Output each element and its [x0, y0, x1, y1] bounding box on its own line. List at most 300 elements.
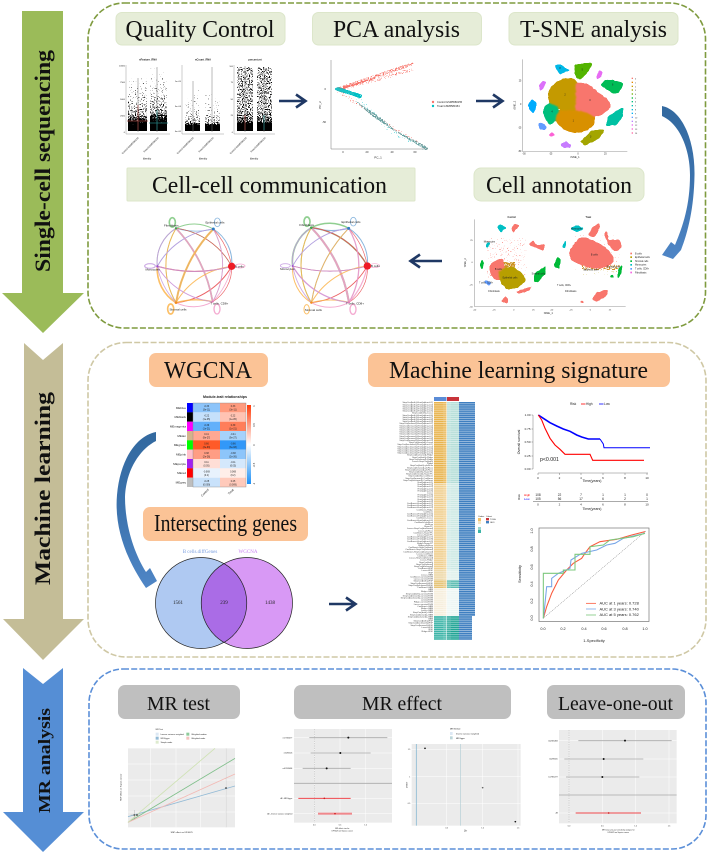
chart: Kaplan-Meier survival curves: High — [524, 493, 531, 497]
chart: cell communication network, control: Fibroblasts — [164, 224, 179, 228]
chart: cell annotation t-SNE: Epithelial cells — [503, 277, 518, 280]
chart: ROC curves: AUC at 3 years: 0.740 — [600, 606, 640, 611]
row labels: Ridge — [427, 463, 434, 465]
heading: Machine learning signature — [368, 353, 670, 387]
chart: quality control violin plots: 10000 — [119, 66, 126, 68]
chart: WGCNA module-trait heatmap: MEtan — [177, 434, 186, 438]
chart: WGCNA module-trait heatmap: Treat — [227, 488, 235, 496]
row labels: StepCox[both]+Lasso — [412, 412, 434, 415]
chart: MR effect forest plot: 0.5 — [339, 825, 341, 827]
chart: WGCNA module-trait heatmap: (0.009) — [229, 484, 237, 486]
row labels: StepCox[backward] — [414, 565, 433, 568]
arrow: quality control to PCA — [279, 94, 306, 108]
chart: ROC curves: 0.6 — [530, 564, 534, 570]
chart: WGCNA module-trait heatmap: MEblack — [174, 415, 186, 419]
row labels: StepCox[both]+Enet[alpha=0.6] — [402, 414, 433, 417]
row labels: StepCox[backward]+Enet[alpha=0.3] — [397, 447, 433, 450]
chart: cell annotation t-SNE — [463, 216, 651, 315]
chart: cell annotation t-SNE: -25 — [470, 284, 473, 286]
row labels: CoxBoost+SuperPC — [413, 531, 433, 534]
chart: t-SNE clusters: -50 — [518, 151, 522, 153]
chart: leave-one-out forest plot: 1.0 — [634, 826, 637, 828]
chart: MR funnel plot — [406, 728, 521, 833]
heading: Cell annotation — [474, 168, 644, 201]
chart: ROC curves: 0.0 — [540, 627, 546, 631]
heading: MR effect: MR effect — [362, 693, 442, 715]
chart: quality control violin plots: Identity — [199, 156, 208, 160]
chart: MR funnel plot: 0.5 — [408, 803, 410, 805]
row labels: StepCox[both]+Enet[alpha=0.1] — [402, 401, 433, 404]
chart: cell annotation t-SNE: 0 — [513, 309, 515, 311]
heading: PCA analysis: PCA analysis — [333, 17, 460, 43]
chart: WGCNA module-trait heatmap: -0.38 — [230, 453, 236, 455]
chart: t-SNE clusters: 25 — [519, 81, 522, 83]
chart: MR effect forest plot: rs62305484 — [283, 768, 292, 770]
chart: leave-one-out forest plot: 0.5 — [601, 826, 604, 828]
chart: cell annotation t-SNE: Stromal cells — [532, 273, 546, 276]
chart: WGCNA module-trait heatmap: -0.11 — [230, 462, 236, 464]
row labels: StepCox[forward]+Lasso — [409, 441, 434, 444]
chart: cell annotation t-SNE: B cells — [635, 253, 643, 255]
heatmap legend: Cohort — [486, 515, 492, 518]
chart: ROC curves: 0.2 — [530, 598, 534, 604]
chart: Kaplan-Meier survival curves: 22 — [558, 493, 561, 497]
chart: PCA scatter: PC_2 — [318, 101, 322, 109]
chart: ROC curves: AUC at 5 years: 0.762 — [600, 612, 640, 617]
chart: t-SNE clusters: 7 — [635, 106, 636, 108]
heading: Leave-one-out — [547, 685, 685, 719]
chart: Kaplan-Meier survival curves: 0 — [646, 493, 648, 497]
row labels: StepCox[both]+RSF — [413, 580, 434, 583]
row labels: Lasso+GBM — [421, 610, 433, 612]
chart: t-SNE clusters: -25 — [549, 154, 553, 156]
chart: cell annotation t-SNE: 0 — [590, 309, 592, 311]
heading: Quality Control: Quality Control — [126, 17, 275, 43]
arrow: annotation to communication — [410, 254, 442, 268]
row labels: Ridge+RSF — [422, 631, 434, 633]
chart: WGCNA module-trait heatmap: MEgrey — [176, 480, 186, 484]
chart: cell communication network, treat: Epithelial cells — [342, 220, 361, 224]
row labels: RSF — [429, 629, 434, 631]
chart: t-SNE clusters: tSNE_2 — [512, 100, 516, 110]
row labels: CoxBoost+GBM — [417, 586, 433, 589]
chart: t-SNE clusters: 25 — [604, 154, 607, 156]
row labels: CoxBoost+Enet[alpha=0.1] — [407, 502, 433, 505]
chart: Kaplan-Meier survival curves: 2 — [559, 476, 561, 480]
chart: WGCNA module-trait heatmap: -0.41 — [230, 434, 236, 436]
chart: WGCNA module-trait heatmap: 1 — [252, 405, 256, 407]
chart: quality control violin plots: 7500 — [120, 82, 126, 84]
arrow: Machine learning — [3, 343, 84, 660]
row labels: StepCox[both]+Enet[alpha=0.9] — [402, 420, 433, 423]
row labels: Ridge+SuperPC — [417, 542, 433, 545]
row labels: Lasso+RSF — [422, 570, 434, 572]
row labels: CoxBoost+Enet[alpha=0.2] — [407, 504, 433, 507]
chart: WGCNA module-trait heatmap — [170, 395, 256, 498]
chart: WGCNA module-trait heatmap: (3e-93) — [203, 447, 210, 449]
row labels: CoxBoost+plsRcox — [414, 521, 434, 524]
chart: Kaplan-Meier survival curves: 10 — [645, 502, 649, 506]
chart: Venn diagram of intersecting genes: 1438 — [265, 601, 276, 606]
row labels: StepCox[forward] — [416, 563, 433, 566]
chart: WGCNA module-trait heatmap: 0.66 — [204, 443, 209, 445]
row labels: StepCox[forward]+CoxBoost — [405, 477, 433, 480]
arrow: Single-cell sequencing: Single-cell sequencing — [30, 50, 55, 272]
row labels: plsRcox — [425, 524, 434, 526]
chart: WGCNA module-trait heatmap: 0.22 — [231, 415, 236, 417]
chart: Kaplan-Meier survival curves: 7 — [580, 493, 582, 497]
chart: quality control violin plots: 2500 — [120, 116, 126, 118]
chart: Kaplan-Meier survival curves: 0 — [537, 502, 539, 506]
row labels: StepCox[forward]+Enet[alpha=0.8] — [399, 437, 433, 440]
row labels: Lasso+CoxBoost — [416, 552, 433, 555]
row labels: StepCox[both]+plsRcox — [410, 464, 434, 467]
chart: t-SNE clusters: 8 — [559, 68, 561, 70]
row labels: CoxBoost+RSF — [418, 567, 434, 570]
chart: quality control violin plots: Treat:GSM5580154 — [143, 136, 160, 154]
chart: leave-one-out forest plot: rs6285505 — [549, 759, 558, 761]
row labels: Lasso+StepCox[both] — [412, 460, 433, 463]
chart: PCA scatter: 40 — [391, 150, 394, 154]
row labels: Enet[alpha=0.3] — [418, 485, 433, 488]
chart: Venn diagram of intersecting genes — [156, 550, 292, 648]
chart: quality control violin plots: Control:GSM5580155 — [121, 136, 140, 155]
row labels: StepCox[backward]+GBM — [408, 615, 433, 618]
arrow: Single-cell sequencing — [2, 11, 84, 333]
chart: Kaplan-Meier survival curves: 4 — [580, 502, 582, 506]
heading: MR test — [118, 685, 240, 719]
chart: PCA scatter: Control:GSM5580155 — [437, 100, 463, 104]
chart: WGCNA module-trait heatmap: 0.41 — [204, 434, 209, 436]
chart: Kaplan-Meier survival curves: 8 — [624, 476, 626, 480]
row labels: StepCox[forward]+SuperPC — [406, 473, 433, 476]
heading: PCA analysis — [312, 12, 482, 45]
chart: WGCNA module-trait heatmap: (3e-11) — [229, 410, 237, 412]
chart: PCA scatter: 0 — [342, 150, 344, 154]
chart: WGCNA module-trait heatmap: Control — [200, 488, 210, 498]
chart: t-SNE clusters — [512, 59, 638, 159]
chart: WGCNA module-trait heatmap: Module-trait relationships — [203, 395, 247, 399]
heading: WGCNA — [149, 353, 268, 387]
chart: quality control violin plots: 0e+00 — [175, 131, 182, 133]
chart: Kaplan-Meier survival curves — [517, 402, 650, 511]
row labels: Lasso+RSF — [422, 627, 434, 629]
chart: t-SNE clusters: 10 — [635, 117, 638, 119]
row labels: StepCox[forward]+Enet[alpha=0.4] — [399, 428, 433, 432]
chart: cell annotation t-SNE: T cells, CD8+ — [479, 283, 494, 285]
chart: cell annotation t-SNE: B cells — [495, 269, 503, 271]
row labels: StepCox[both]+survivalSVM — [406, 592, 433, 595]
row labels: StepCox[backward]+RSF — [408, 584, 434, 587]
chart: WGCNA module-trait heatmap: (1e-05) — [229, 419, 237, 421]
chart: Kaplan-Meier survival curves: 17 — [579, 497, 583, 501]
chart: MR test scatter: Simple mode — [161, 742, 173, 744]
chart: Kaplan-Meier survival curves: 0.00 — [525, 467, 531, 471]
chart: t-SNE clusters: 3 — [590, 136, 592, 138]
chart: quality control violin plots: Control:GSM5580155 — [229, 136, 248, 155]
row labels: StepCox[forward]+Enet[alpha=0.1] — [399, 422, 433, 425]
chart: MR test scatter: Weighted median — [191, 733, 207, 736]
chart: Kaplan-Meier survival curves: Low — [604, 402, 611, 406]
row labels: Lasso+Ridge — [420, 560, 434, 562]
chart: WGCNA module-trait heatmap: (0.009) — [203, 484, 210, 486]
chart: ROC curves: AUC at 1 years: 0.728 — [600, 600, 640, 606]
chart: cell annotation t-SNE: Stromal cells — [607, 265, 621, 268]
chart: t-SNE clusters: 4 — [635, 94, 637, 96]
chart: cell annotation t-SNE: Monocytes — [635, 264, 647, 267]
heading: Leave-one-out: Leave-one-out — [558, 693, 673, 715]
chart: MR funnel plot: MR Egger — [456, 737, 465, 740]
chart: t-SNE clusters: 11 — [635, 121, 637, 123]
row labels: Lasso+survivalSVM — [414, 603, 433, 606]
chart: cell annotation t-SNE: 25 — [532, 309, 535, 311]
chart: t-SNE clusters: 5 — [635, 98, 637, 100]
row labels: Enet[alpha=0.8] — [418, 498, 433, 501]
chart: Venn diagram of intersecting genes: 239 — [220, 601, 228, 606]
row labels: StepCox[backward]+Enet[alpha=0.5] — [397, 452, 433, 455]
arrow: MR analysis: MR analysis — [35, 708, 54, 813]
chart: MR test scatter: SNP effect on Sepsis cancer — [120, 773, 123, 801]
chart: Kaplan-Meier survival curves: 0.25 — [525, 454, 531, 458]
chart: t-SNE clusters: 14 — [635, 133, 638, 135]
chart: WGCNA module-trait heatmap: -0.25 — [204, 481, 210, 483]
chart: cell communication network, control: Stromal cells — [169, 307, 187, 311]
row labels: Lasso+StepCox[forward] — [409, 557, 433, 560]
chart: ROC curves: 1-Specificity — [583, 638, 605, 643]
chart: WGCNA module-trait heatmap: 0.25 — [231, 481, 236, 483]
chart: MR test scatter: Weighted mode — [191, 737, 206, 740]
chart: MR funnel plot: 1/SEIV — [406, 781, 408, 788]
row labels: StepCox[backward]+Enet[alpha=0.2] — [397, 445, 433, 448]
chart: MR effect forest plot: rs17365477 — [283, 737, 292, 739]
row labels: CoxBoost+Enet[alpha=0.7] — [407, 536, 433, 539]
row labels: Enet[alpha=0.6] — [418, 494, 433, 497]
chart: cell annotation t-SNE: Fibroblasts — [565, 290, 577, 293]
chart: WGCNA module-trait heatmap: (0.05) — [203, 466, 210, 468]
chart: WGCNA module-trait heatmap: 0.38 — [204, 453, 209, 455]
chart: t-SNE clusters: 4 — [551, 112, 553, 114]
chart: WGCNA module-trait heatmap: MEmagenta — [170, 424, 186, 428]
row labels: Enet[alpha=0.4] — [418, 487, 433, 490]
row labels: StepCox[forward]+Enet[alpha=0.9] — [399, 439, 433, 442]
chart: cell communication network, treat — [280, 217, 380, 314]
heading: T-SNE analysis: T-SNE analysis — [520, 17, 667, 43]
row labels: StepCox[forward]+survivalSVM — [403, 594, 433, 597]
chart: Venn diagram of intersecting genes: 1561 — [173, 601, 184, 606]
row labels: Lasso+plsRcox — [418, 530, 434, 532]
row labels: StepCox[both]+GBM — [413, 611, 433, 614]
row labels: StepCox[backward]+Ridge — [407, 454, 434, 457]
chart: PCA scatter: Treat:GSM5580154 — [437, 104, 460, 108]
chart: quality control violin plots: nCount_RNA — [195, 58, 211, 62]
row labels: CoxBoost+Enet[alpha=0.3] — [407, 506, 433, 509]
chart: MR effect forest plot: All - MR Egger — [280, 797, 293, 800]
chart: cell annotation t-SNE: B cells — [591, 254, 599, 256]
chart: Kaplan-Meier survival curves: 0 — [537, 476, 539, 480]
chart: WGCNA module-trait heatmap: -0.39 — [204, 425, 210, 427]
heading: Machine learning signature: Machine learning signature — [389, 358, 648, 384]
row labels: StepCox[forward]+GBM — [410, 613, 433, 616]
row labels: StepCox[backward]+Enet[alpha=0.1] — [397, 443, 433, 446]
row labels: StepCox[both]+Enet[alpha=0.5] — [402, 410, 433, 413]
chart: leave-one-out forest plot: 0.0 — [568, 826, 570, 828]
row labels: StepCox[forward]+RSF — [410, 582, 434, 585]
chart: WGCNA module-trait heatmap: (0.2) — [231, 475, 236, 477]
chart: WGCNA module-trait heatmap: 0.39 — [231, 425, 236, 427]
chart: Kaplan-Meier survival curves: 108 — [535, 493, 541, 497]
chart: t-SNE clusters: 9 — [635, 113, 637, 115]
chart: cell annotation t-SNE: Monocytes — [571, 228, 583, 231]
chart: quality control violin plots: nFeature_RNA — [139, 58, 157, 62]
row labels: StepCox[forward]+Enet[alpha=0.2] — [399, 424, 433, 427]
chart: quality control violin plots: 50 — [231, 99, 234, 101]
chart: cell communication network, treat: Monocytes — [280, 267, 295, 271]
chart: WGCNA module-trait heatmap: 0.5 — [252, 423, 256, 427]
chart: WGCNA module-trait heatmap: -0.66 — [230, 443, 236, 445]
chart: MR effect forest plot: All - Inverse variance weighted — [267, 812, 292, 815]
chart: WGCNA module-trait heatmap: MEgreen — [174, 443, 186, 447]
chart: MR funnel plot: 1 — [409, 776, 410, 778]
row labels: StepCox[both] — [419, 561, 433, 564]
chart: MR effect forest plot: IVF0025 on Sepsis cancer — [332, 831, 353, 833]
chart: WGCNA module-trait heatmap: (3e-93) — [229, 447, 237, 449]
chart: MR effect forest plot: rs6285505 — [284, 753, 292, 755]
chart: cell annotation t-SNE: Fibroblasts — [635, 271, 647, 274]
chart: cell communication network, treat: T cells, CD8+ — [346, 301, 364, 305]
chart: cell annotation t-SNE: 25 — [470, 240, 473, 242]
chart: MR effect forest plot — [267, 729, 392, 833]
chart: quality control violin plots: percent.mt — [248, 58, 262, 62]
row labels: StepCox[forward]+Ridge — [409, 458, 434, 461]
chart: WGCNA module-trait heatmap: (1e-21) — [203, 428, 210, 430]
chart: cell annotation t-SNE: 25 — [609, 309, 612, 311]
arrow: curved t-SNE to annotation — [662, 106, 695, 259]
chart: machine learning C-index heatmap — [397, 397, 496, 640]
chart: MR funnel plot: MR Method — [450, 728, 460, 731]
chart: Kaplan-Meier survival curves: 1 — [602, 493, 604, 497]
row labels: StepCox[both]+Enet[alpha=0.8] — [402, 418, 433, 421]
chart: WGCNA module-trait heatmap: 0.11 — [204, 462, 209, 464]
chart: cell annotation t-SNE: T cells, CD8+ — [557, 285, 572, 287]
chart: ROC curves: 0.6 — [601, 627, 607, 631]
chart: quality control violin plots: Identity — [143, 156, 152, 160]
row labels: Lasso+SuperPC — [417, 533, 433, 536]
row labels: StepCox[forward]+Enet[alpha=0.6] — [399, 433, 433, 436]
chart: leave-one-out forest plot: rs17365477 — [548, 777, 558, 779]
row labels: Ridge+plsRcox — [418, 545, 434, 547]
chart: MR test scatter: MR Egger — [161, 737, 170, 740]
chart: cell annotation t-SNE: tSNE_1 — [544, 311, 553, 315]
chart: leave-one-out forest plot: MR leave-one-out sensitivity analysis for — [602, 828, 635, 831]
chart: quality control violin plots: 0 — [124, 132, 126, 134]
chart: t-SNE clusters: 5 — [582, 70, 584, 72]
chart: Kaplan-Meier survival curves: 6 — [602, 502, 604, 506]
chart: cell annotation t-SNE: -25 — [492, 309, 496, 311]
chart: MR funnel plot: 1.5 — [408, 749, 410, 751]
row labels: CoxBoost+GBM — [417, 605, 433, 608]
heatmap legend — [478, 515, 496, 533]
arrow: Machine learning: Machine learning — [30, 392, 55, 585]
chart: WGCNA module-trait heatmap: MEpink — [176, 452, 186, 456]
chart: cell annotation t-SNE: Stromal cells — [635, 260, 649, 263]
chart: cell communication network, control: B cells — [235, 265, 244, 269]
chart: cell communication network, treat: Fibroblasts — [299, 223, 314, 227]
chart: PCA scatter: 60 — [414, 150, 417, 154]
chart: t-SNE clusters: 0 — [520, 104, 522, 106]
row labels: CoxBoost+StepCox[forward] — [405, 548, 433, 551]
chart: t-SNE clusters: 13 — [635, 129, 638, 131]
row labels: StepCox[both]+Enet[alpha=0.4] — [402, 408, 433, 410]
heatmap legend: GEO — [490, 522, 495, 524]
chart: quality control violin plots: 100 — [229, 66, 234, 68]
chart: quality control violin plots: 0 — [232, 132, 234, 134]
row labels: StepCox[forward]+plsRcox — [407, 466, 434, 469]
chart: WGCNA module-trait heatmap: (1e-21) — [229, 428, 237, 430]
chart: t-SNE clusters: 2 — [635, 86, 636, 88]
row labels: StepCox[backward]+plsRcox — [405, 468, 434, 471]
row labels: Enet[alpha=0.1] — [418, 481, 433, 484]
chart: quality control violin plots: 5000 — [120, 99, 126, 101]
heading: WGCNA: WGCNA — [164, 358, 253, 384]
heading: MR test: MR test — [147, 693, 210, 715]
chart: cell annotation t-SNE: Epithelial cells — [584, 269, 599, 272]
row labels: CoxBoost+Enet[alpha=0.5] — [407, 515, 433, 518]
chart: cell annotation t-SNE: Treat — [586, 216, 591, 219]
heatmap legend: Cindex — [478, 516, 484, 518]
chart: MR funnel plot: β IV — [464, 831, 468, 833]
chart: Venn diagram of intersecting genes: WGCNA — [239, 550, 258, 555]
row labels: StepCox[both]+Ridge — [412, 456, 434, 459]
chart: Kaplan-Meier survival curves: Risk — [570, 402, 577, 406]
chart: cell annotation t-SNE: Epithelial cells — [635, 256, 651, 259]
chart: Kaplan-Meier survival curves: 0.75 — [525, 427, 531, 431]
chart: leave-one-out forest plot: rs62305484 — [548, 740, 558, 742]
chart: quality control violin plots: 5e+04 — [175, 106, 182, 108]
chart: PCA scatter: -50 — [322, 120, 327, 124]
chart: quality control violin plots — [119, 58, 275, 160]
chart: WGCNA module-trait heatmap: -0.33 — [204, 406, 210, 408]
panel: machine learning — [88, 342, 706, 657]
arrow: curved WGCNA to Venn — [117, 432, 157, 588]
chart: Kaplan-Meier survival curves: 56 — [558, 497, 561, 501]
chart: t-SNE clusters: 6 — [635, 102, 637, 104]
chart: leave-one-out forest plot: 1.5 — [668, 826, 670, 828]
heading: Cell-cell communication: Cell-cell communication — [152, 173, 387, 199]
row labels: SuperPC — [424, 525, 433, 528]
row labels: StepCox[forward]+RSF — [410, 624, 434, 627]
chart: Kaplan-Meier survival curves: 1 — [624, 493, 626, 497]
row labels: Enet[alpha=0.9] — [418, 500, 433, 503]
row labels: CoxBoost+survivalSVM — [410, 576, 433, 579]
row labels: Lasso+GBM — [421, 574, 433, 576]
chart: MR effect forest plot: MR effect size for — [335, 827, 350, 830]
chart: Kaplan-Meier survival curves: 4 — [580, 476, 582, 480]
chart: Kaplan-Meier survival curves: Overall survival — [517, 430, 521, 454]
chart: WGCNA module-trait heatmap: (1e-05) — [203, 419, 210, 421]
row labels: StepCox[both]+SuperPC — [409, 470, 433, 473]
chart: leave-one-out forest plot — [548, 730, 677, 834]
chart: WGCNA module-trait heatmap: (0.2) — [204, 475, 209, 477]
chart: t-SNE clusters: -25 — [518, 127, 522, 129]
chart: quality control violin plots: Treat:GSM5580154 — [198, 136, 215, 154]
row labels: Lasso+survivalSVM — [414, 578, 433, 581]
chart: ROC curves: Sensitivity — [517, 565, 522, 583]
row labels: StepCox[forward]+Enet[alpha=0.7] — [399, 435, 433, 438]
chart: MR test scatter: MR Test — [156, 728, 163, 731]
heading: Cell-cell communication — [127, 168, 415, 201]
row labels: survivalSVM — [421, 599, 433, 602]
chart: ROC curves: 0.0 — [530, 615, 534, 621]
